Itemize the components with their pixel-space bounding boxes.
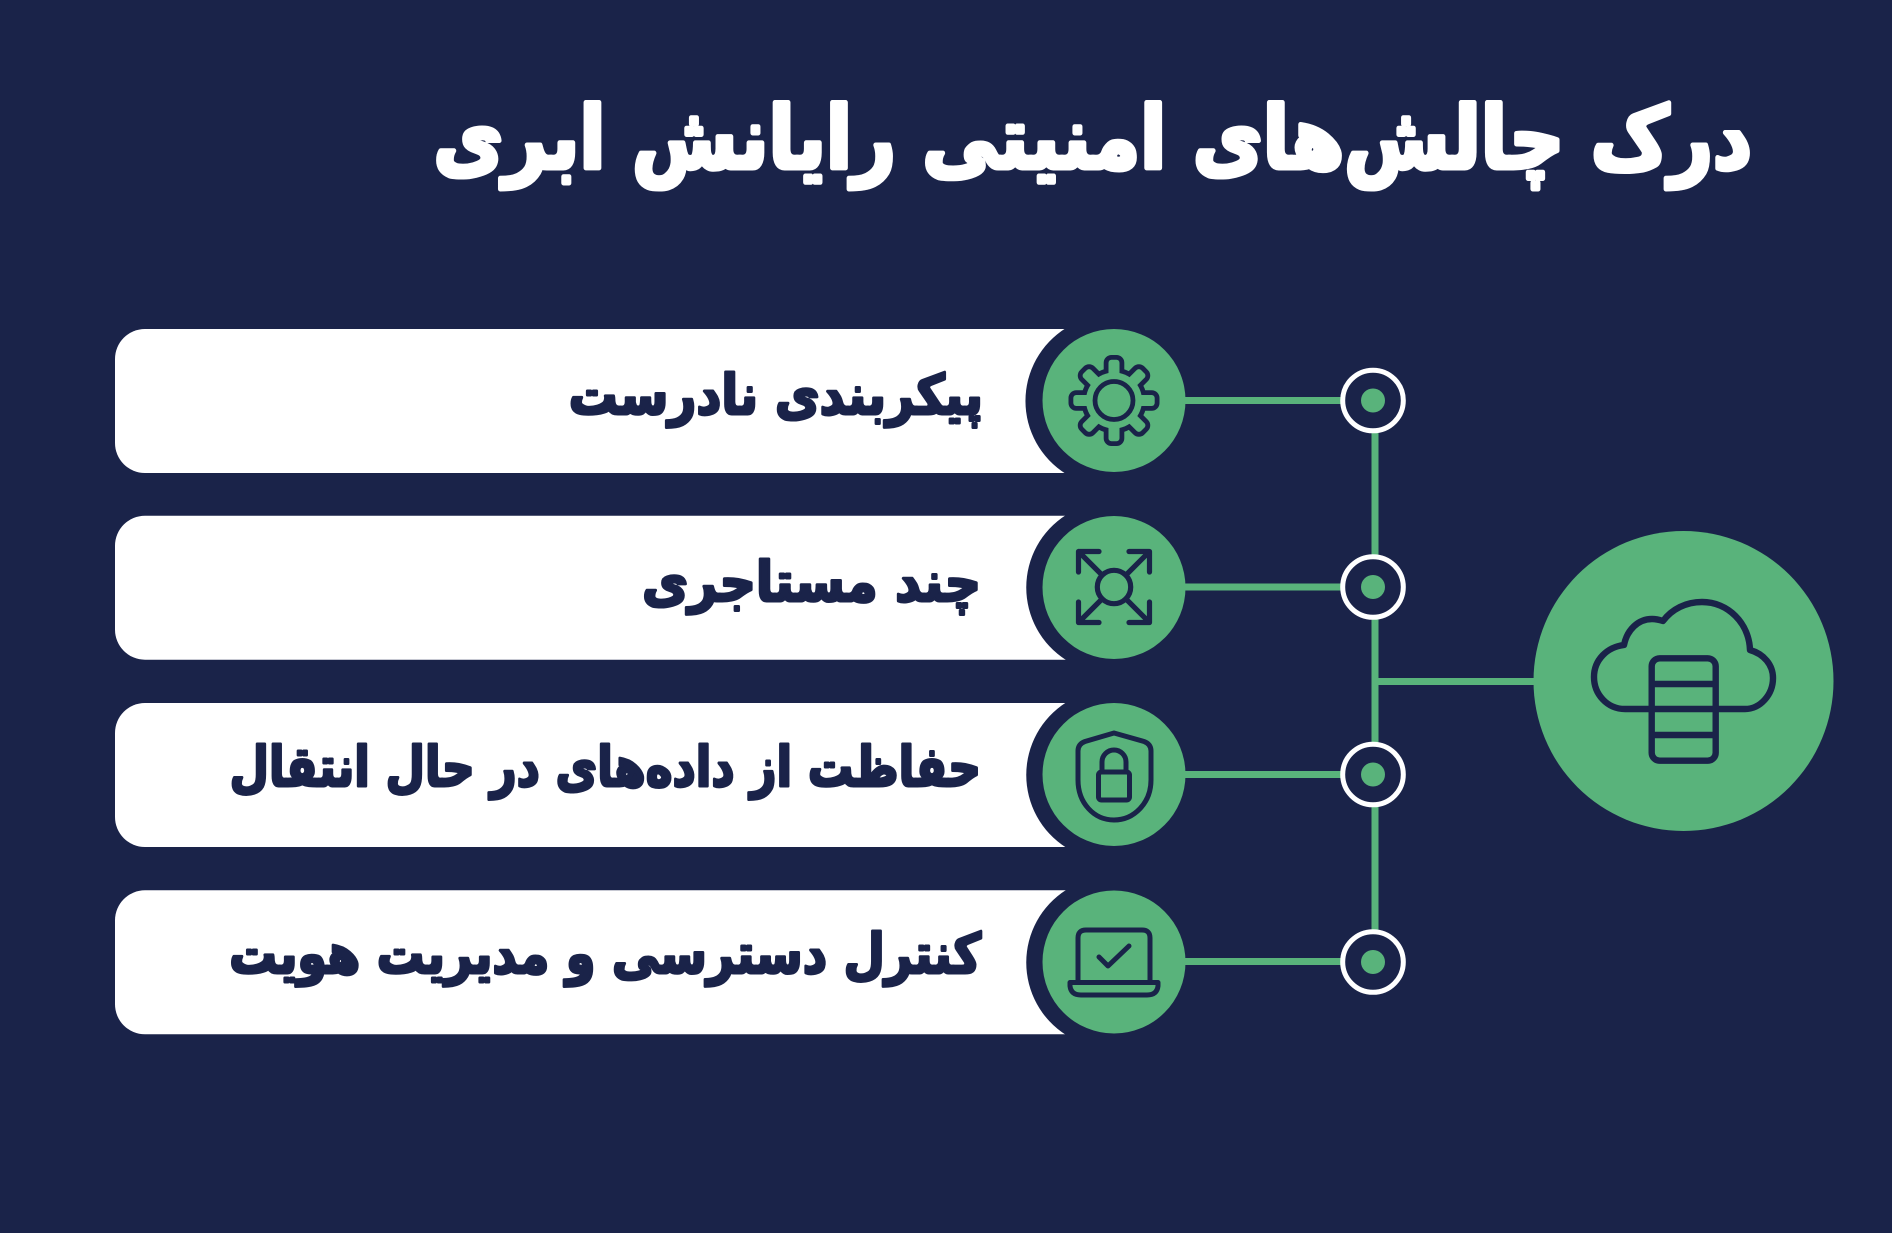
badge 1 xyxy=(1042,329,1186,472)
node 1 xyxy=(1343,370,1403,431)
bar 4 xyxy=(115,890,1067,1034)
bar 2 xyxy=(115,516,1067,660)
node 4 xyxy=(1343,932,1403,992)
bar 4 cut-out ring xyxy=(1026,890,1114,1035)
bar 2 label: چند مستاجری xyxy=(642,551,981,615)
badge 4 xyxy=(1042,890,1186,1034)
badge 3 xyxy=(1042,703,1186,846)
bar 1 cut-out ring xyxy=(1025,328,1114,474)
bar 3 xyxy=(115,703,1067,847)
node 2 xyxy=(1343,557,1403,617)
item 4: access and identity management xyxy=(115,890,1403,1035)
item 1: misconfiguration xyxy=(115,328,1403,474)
bar 3 label: حفاظت از داده‌های در حال انتقال xyxy=(230,735,981,799)
item 2: multi-tenancy xyxy=(115,515,1403,660)
icon: gear xyxy=(1073,360,1155,441)
icon: laptop check xyxy=(1070,930,1158,995)
bar 2 cut-out ring xyxy=(1026,515,1114,660)
item 3: data in transit xyxy=(115,702,1403,848)
hub: cloud server xyxy=(1534,531,1834,831)
badge 2 xyxy=(1042,516,1186,659)
node 3 xyxy=(1343,744,1403,805)
connector lines xyxy=(1180,397,1535,965)
icon: arrows from circle xyxy=(1078,552,1150,622)
icon: cloud server xyxy=(1594,602,1773,761)
bar 3 cut-out ring xyxy=(1026,702,1114,848)
bar 4 label: کنترل دسترسی و مدیریت هویت xyxy=(229,923,981,987)
hub circle xyxy=(1534,531,1834,831)
bar 1 xyxy=(115,329,1067,473)
bar 1 label: پیکربندی نادرست xyxy=(569,364,983,428)
icon: shield lock xyxy=(1078,733,1151,820)
title: درک چالش‌های امنیتی رایانش ابری xyxy=(433,90,1752,189)
